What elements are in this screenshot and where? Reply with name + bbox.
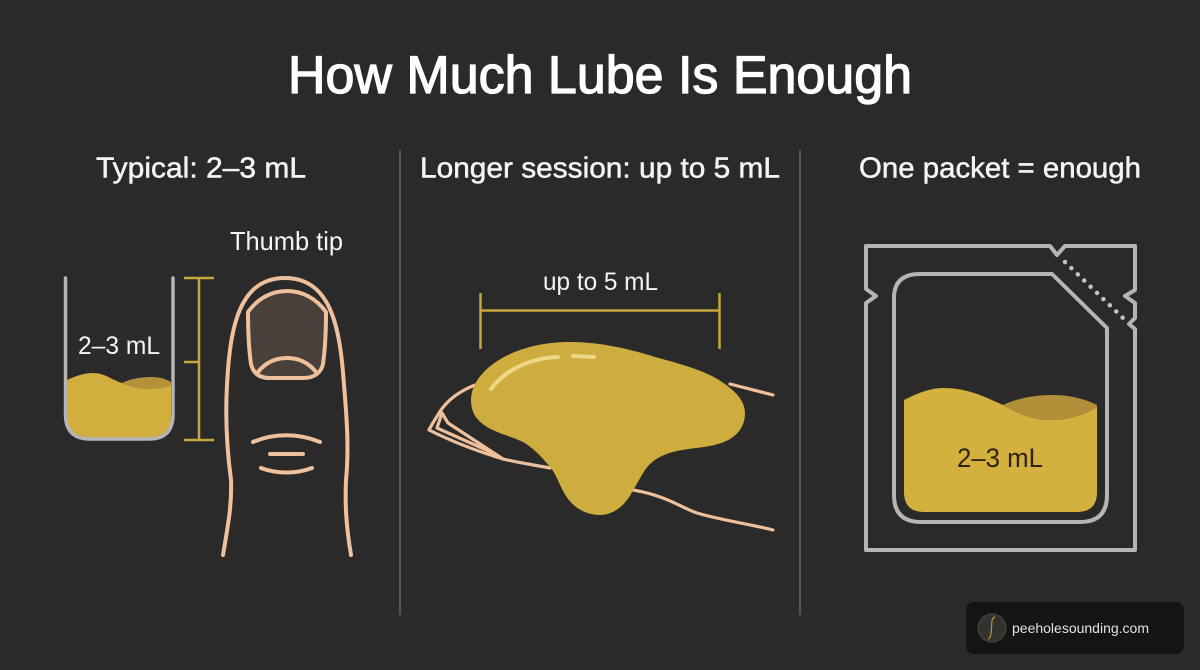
panel: typical amount	[66, 152, 351, 555]
icon: packet	[866, 246, 1135, 550]
icon: lube blob	[471, 342, 745, 515]
badge: website	[966, 602, 1184, 654]
panel: longer session	[420, 152, 780, 530]
heading: one packet: One packet = enough	[859, 152, 1141, 184]
bracket: width scale	[480, 293, 720, 349]
text: website: peeholesounding.com	[1012, 620, 1149, 636]
title: How Much Lube Is Enough	[288, 46, 912, 105]
highlight: blob sheen	[491, 356, 594, 389]
icon: measuring cup	[66, 278, 173, 439]
heading: typical: Typical: 2–3 mL	[96, 152, 306, 184]
panel: one packet	[859, 152, 1141, 550]
heading: longer session: Longer session: up to 5 mL	[420, 152, 780, 184]
label: thumb tip: Thumb tip	[230, 226, 343, 256]
bracket: height scale	[184, 278, 214, 440]
icon: logo	[978, 614, 1006, 642]
icon: thumb	[223, 278, 351, 555]
liquid level	[904, 388, 1097, 512]
icon: hand outline	[429, 384, 773, 530]
label: up to 5 mL: up to 5 mL	[543, 268, 658, 296]
label: packet volume: 2–3 mL	[957, 443, 1043, 473]
label: cup volume: 2–3 mL	[78, 332, 160, 360]
